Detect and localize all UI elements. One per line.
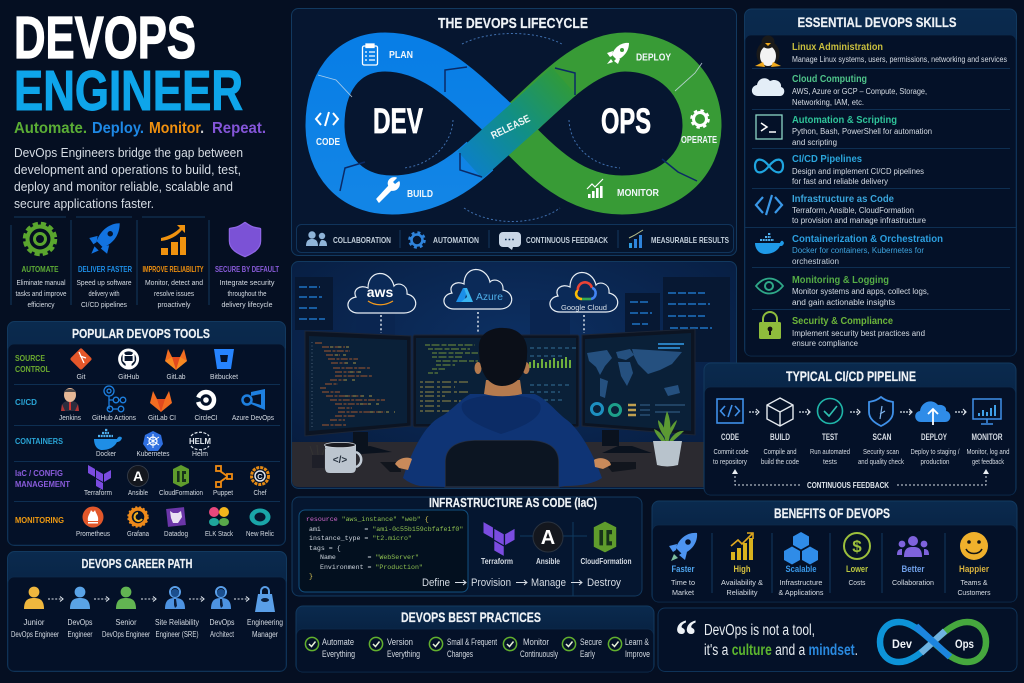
career step labels: DevOps xyxy=(68,618,92,627)
career step labels: Site Reliability xyxy=(155,618,199,627)
card: deliver faster: Speed up software xyxy=(76,278,132,287)
pipeline labels: TEST xyxy=(822,432,838,443)
iac workflow: Provision xyxy=(471,577,511,589)
tool labels: containers: Helm xyxy=(192,449,208,458)
career step labels: Architect xyxy=(210,630,235,639)
practice labels: Version xyxy=(387,637,413,647)
cloud: azure xyxy=(444,269,512,309)
stage: code: CODE xyxy=(316,136,340,148)
row labels: CONTAINERS xyxy=(15,436,63,446)
tool labels: monitoring: New Relic xyxy=(246,529,274,538)
skill: cloud: Networking, IAM, etc. xyxy=(792,98,864,107)
row labels: MANAGEMENT xyxy=(15,479,71,489)
card: secure by default: Integrate security xyxy=(220,278,275,287)
panel: devops lifecycle xyxy=(292,8,736,256)
pipeline descriptions: Run automated xyxy=(810,447,850,456)
skill: security: Security & Compliance xyxy=(792,315,893,327)
row labels: CI/CD xyxy=(15,397,37,407)
label: release: RELEASE xyxy=(489,113,532,142)
career steps icons xyxy=(24,587,275,612)
card: improve reliability: resolve issues xyxy=(154,289,194,298)
tool labels: iac: Puppet xyxy=(213,488,234,497)
benefit descriptions: Time to xyxy=(671,578,695,587)
career step labels: Engineer (SRE) xyxy=(156,630,199,639)
practice labels: Monitor xyxy=(523,637,549,647)
intro paragraph: secure applications faster. xyxy=(14,196,154,211)
skill: iac: Infrastructure as Code xyxy=(792,193,894,205)
title: DevOps: DEVOPS xyxy=(14,5,196,71)
keyboards xyxy=(380,462,636,472)
benefit descriptions: & Applications xyxy=(778,588,824,597)
tool labels: ci/cd: Azure DevOps xyxy=(232,413,274,422)
label: dev: DEV xyxy=(373,102,423,141)
pipeline descriptions: get feedback xyxy=(972,457,1004,466)
skill: security xyxy=(759,312,925,348)
iac workflow: Destroy xyxy=(587,577,621,589)
skill: containers: orchestration xyxy=(792,257,839,266)
skill: linux xyxy=(755,36,1007,67)
heading: career path: DEVOPS CAREER PATH xyxy=(82,556,192,571)
iac workflow xyxy=(422,577,621,589)
stage: deploy xyxy=(607,43,671,64)
benefit titles: Happier xyxy=(959,564,990,574)
skill: automation: Automation & Scripting xyxy=(792,114,897,126)
benefit icons: $ xyxy=(852,537,862,556)
card: improve reliability: proactively xyxy=(158,300,191,309)
pipeline labels: BUILD xyxy=(770,432,790,443)
practice labels: Small & Frequent xyxy=(447,637,497,647)
skill: ci/cd: for fast and reliable delivery xyxy=(792,177,888,186)
card: improve reliability: Monitor, detect and xyxy=(145,278,203,287)
tagline: Repeat. xyxy=(212,120,266,137)
skill: containers: Docker for containers, Kubernetes for xyxy=(792,246,924,255)
icon: rocket xyxy=(89,223,120,254)
benefit titles xyxy=(672,564,990,574)
pipeline labels: CODE xyxy=(721,432,739,443)
intro paragraph: development and operations to build, test, xyxy=(14,162,241,177)
card: deliver faster: DELIVER FASTER xyxy=(78,265,132,274)
tool labels: iac: Terraform xyxy=(84,488,112,497)
quote text: it's a culture and a mindset. xyxy=(704,642,858,659)
pipeline arrows xyxy=(749,409,966,415)
icon: rising chart xyxy=(161,225,186,255)
cloud: aws: aws xyxy=(367,284,393,300)
tagline: Deploy. xyxy=(92,120,144,137)
quote mark: “ xyxy=(675,611,697,660)
skill: automation: Python, Bash, PowerShell for automation xyxy=(792,127,932,136)
row labels: CONTROL xyxy=(15,364,50,374)
bottom strip: practices xyxy=(296,224,734,252)
title: Engineer: ENGINEER xyxy=(14,59,243,123)
skill: monitoring: and gain actionable insights xyxy=(792,298,895,307)
code sample: Name = "WebServer" xyxy=(320,554,419,561)
potted plant xyxy=(653,411,684,466)
stage: plan xyxy=(362,44,413,65)
tool labels: ci/cd: GitLab CI xyxy=(148,413,176,422)
tool labels: ci/cd: Jenkins xyxy=(59,413,81,422)
value cards xyxy=(11,217,279,309)
tool labels: monitoring xyxy=(76,529,274,538)
monitor: code left xyxy=(305,331,411,455)
pipeline descriptions: and quality check xyxy=(858,457,904,466)
tool icons: containers xyxy=(94,430,211,451)
skill: linux: Linux Administration xyxy=(792,41,883,53)
skill: cloud: Cloud Computing xyxy=(792,73,867,85)
icon: cloud xyxy=(752,78,784,96)
benefit descriptions: Collaboration xyxy=(892,578,934,587)
skill: monitoring: Monitor systems and apps, collect logs, xyxy=(792,287,929,296)
benefit descriptions: Market xyxy=(672,588,695,597)
tool labels: monitoring: Grafana xyxy=(127,529,150,538)
practice labels: Improve xyxy=(625,649,650,659)
iac workflow: Define xyxy=(422,577,450,589)
tool labels: monitoring: Prometheus xyxy=(76,529,110,538)
skill: iac xyxy=(756,193,927,225)
code sample: } xyxy=(309,573,313,580)
code sample: ami = "ami-0c55b159cbfafe1f0" xyxy=(309,526,463,533)
code sample xyxy=(299,510,468,592)
skill: automation: and scripting xyxy=(792,138,837,147)
intro paragraph xyxy=(14,145,243,211)
skill: cloud: AWS, Azure or GCP – Compute, Storage, xyxy=(792,87,927,96)
code sample: resource "aws_instance" "web" { xyxy=(306,516,429,523)
card: automate xyxy=(16,224,66,309)
stage: monitor xyxy=(587,179,659,199)
tool labels: iac xyxy=(84,488,267,497)
skill: containers xyxy=(755,233,943,266)
infinity loop xyxy=(318,52,702,195)
benefit titles: Better xyxy=(902,564,925,574)
heading: benefits: BENEFITS OF DEVOPS xyxy=(774,506,890,521)
iac logo labels: Terraform xyxy=(481,556,513,566)
iac logo labels xyxy=(481,556,632,566)
tool labels: source control xyxy=(76,372,239,381)
career step labels: DevOps Engineer xyxy=(102,630,150,639)
pipeline labels: SCAN xyxy=(872,432,892,443)
coffee mug: </> xyxy=(333,455,347,466)
practice labels: Automate xyxy=(322,637,354,647)
pipeline descriptions: build the code xyxy=(761,457,799,466)
person from behind xyxy=(395,328,611,487)
career step labels: Manager xyxy=(252,630,278,639)
cloud: google cloud: Google Cloud xyxy=(561,303,607,312)
tool labels: source control: GitHub xyxy=(118,372,139,381)
icon: feedback bubble xyxy=(499,232,521,250)
iac workflow: Manage xyxy=(531,577,566,589)
row labels: MONITORING xyxy=(15,515,64,525)
tool labels: source control: Bitbucket xyxy=(210,372,239,381)
pipeline descriptions: Deploy to staging / xyxy=(910,447,960,456)
chair xyxy=(445,440,559,487)
panel: essential skills xyxy=(744,9,1016,356)
continuous feedback loop: CONTINUOUS FEEDBACK xyxy=(807,480,890,490)
skill: automation xyxy=(756,114,932,147)
code sample: instance_type = "t2.micro" xyxy=(309,535,412,542)
panel: infrastructure as code xyxy=(292,495,642,596)
skill: iac: to provision and manage infrastructure xyxy=(792,216,927,225)
pipeline icons xyxy=(717,397,1001,426)
icon: infinity xyxy=(755,160,783,172)
card: secure by default: throughout the xyxy=(228,289,266,298)
skill: containers: Containerization & Orchestration xyxy=(792,233,943,245)
row labels: SOURCE xyxy=(15,353,45,363)
iac logos xyxy=(484,522,616,596)
card: secure by default: SECURE BY DEFAULT xyxy=(215,265,279,274)
icon: results chart xyxy=(629,230,643,248)
icon: terminal xyxy=(756,115,782,139)
stage: plan: PLAN xyxy=(389,49,413,61)
monitor: code center xyxy=(413,335,579,427)
benefit descriptions xyxy=(671,578,991,597)
title block xyxy=(14,5,266,211)
coffee mug xyxy=(310,442,361,473)
tool icons: iac: C xyxy=(257,472,263,481)
stage: code xyxy=(316,112,340,148)
practice labels: Changes xyxy=(447,649,473,659)
benefit descriptions: Customers xyxy=(958,588,991,597)
tool icons: iac xyxy=(88,465,268,490)
card: deliver faster: CI/CD pipelines xyxy=(81,300,127,309)
tool labels: ci/cd xyxy=(59,413,274,422)
benefit titles: Faster xyxy=(672,564,695,574)
code sample: tags = { xyxy=(309,545,341,552)
iac logo labels: Ansible xyxy=(536,556,560,566)
benefit titles: High xyxy=(734,564,750,574)
card: improve reliability: IMPROVE RELIABILITY xyxy=(142,265,204,274)
tool labels: monitoring: Datadog xyxy=(164,529,188,538)
tool labels: ci/cd: CircleCI xyxy=(194,413,218,422)
practice labels: Everything xyxy=(322,649,355,659)
heading: skills: ESSENTIAL DEVOPS SKILLS xyxy=(798,14,956,30)
intro paragraph: DevOps Engineers bridge the gap between xyxy=(14,145,243,160)
career arrows xyxy=(48,596,249,602)
card: automate: AUTOMATE xyxy=(22,265,59,274)
career step labels: DevOps Engineer xyxy=(11,630,59,639)
skill: monitoring xyxy=(756,274,929,307)
iac logos: A xyxy=(541,527,555,549)
tool labels: iac: Chef xyxy=(254,488,267,497)
tool labels: ci/cd: GitHub Actions xyxy=(92,413,136,422)
monitor: dashboard right xyxy=(582,329,695,453)
pipeline descriptions: tests xyxy=(823,457,837,466)
dashed flow arrows xyxy=(404,34,620,222)
tool labels: containers: Kubernetes xyxy=(136,449,170,458)
benefit icons xyxy=(669,532,988,564)
skill: ci/cd: Design and implement CI/CD pipelines xyxy=(792,167,924,176)
pipeline descriptions: Security scan xyxy=(863,447,899,456)
practice labels: Learn & xyxy=(625,637,649,647)
card: secure by default: delivery lifecycle xyxy=(222,300,272,309)
icon: shield xyxy=(230,223,260,256)
card: secure by default xyxy=(215,223,279,309)
tool icons: source control xyxy=(70,348,234,370)
practice labels: Everything xyxy=(387,649,420,659)
panel: best practices xyxy=(296,606,654,672)
check icons xyxy=(305,637,622,651)
practice labels xyxy=(322,637,650,659)
label: ops: OPS xyxy=(601,102,651,141)
career step labels: DevOps xyxy=(210,618,234,627)
card: deliver faster xyxy=(76,223,132,309)
row labels xyxy=(15,353,71,525)
bottom strip: practices: MEASURABLE RESULTS xyxy=(651,236,729,245)
pipeline descriptions: Commit code xyxy=(714,447,748,456)
pipeline labels: DEPLOY xyxy=(921,432,947,443)
dev ops logo: Dev xyxy=(892,639,913,651)
pipeline descriptions xyxy=(713,447,1010,466)
skill: security: Implement security best practices and xyxy=(792,329,925,338)
tool labels: source control: Git xyxy=(76,372,86,381)
bottom strip: practices: COLLABORATION xyxy=(333,236,391,245)
stage: deploy: DEPLOY xyxy=(636,52,671,64)
benefit descriptions: Reliability xyxy=(726,588,758,597)
panel: benefits xyxy=(652,501,1017,602)
stage: operate: OPERATE xyxy=(681,135,717,146)
icon: eye xyxy=(756,278,783,294)
skill: security: ensure compliance xyxy=(792,339,859,348)
dev ops logo xyxy=(880,622,986,662)
panel: career path xyxy=(8,552,286,672)
cloud: google cloud xyxy=(550,272,618,312)
panel: quote xyxy=(658,608,1017,672)
tool labels: iac: Ansible xyxy=(128,488,148,497)
pipeline descriptions: Compile and xyxy=(764,447,796,456)
benefit descriptions: Availability & xyxy=(721,578,763,587)
icon: docker whale xyxy=(755,234,784,254)
cloud: azure: Azure xyxy=(476,292,503,303)
benefit titles: Lower xyxy=(846,564,868,574)
career step labels: Engineering xyxy=(247,618,283,627)
tagline: Monitor. xyxy=(149,120,204,137)
heading: iac: INFRASTRUCTURE AS CODE (IaC) xyxy=(429,495,597,510)
quote text xyxy=(704,622,858,659)
card: automate: tasks and improve xyxy=(16,289,66,298)
bottom strip: practices: CONTINUOUS FEEDBACK xyxy=(526,236,608,245)
pipeline descriptions: production xyxy=(920,457,950,466)
stage: operate xyxy=(681,110,717,146)
row labels: IaC / CONFIG xyxy=(15,468,63,478)
career step labels xyxy=(11,618,283,639)
skill: ci/cd xyxy=(755,153,924,186)
tool icons: iac: A xyxy=(133,468,143,484)
pipeline labels xyxy=(721,432,1003,443)
tool labels: iac: CloudFormation xyxy=(159,488,203,497)
skill: cloud xyxy=(752,73,927,107)
career step labels: Engineer xyxy=(68,630,93,639)
tool icons: ci/cd xyxy=(61,386,265,412)
tool icons: monitoring xyxy=(82,506,270,528)
career step labels: Junior xyxy=(24,618,45,627)
tagline: Automate. xyxy=(14,120,87,137)
card: improve reliability xyxy=(142,225,204,309)
skill: ci/cd: CI/CD Pipelines xyxy=(792,153,862,165)
code sample: Environment = "Production" xyxy=(320,564,423,571)
panel: engineer illustration xyxy=(292,262,737,488)
card: automate: Eliminate manual xyxy=(16,278,66,287)
stage: monitor: MONITOR xyxy=(617,187,659,199)
icon: penguin xyxy=(755,36,781,67)
heading: pipeline: TYPICAL CI/CD PIPELINE xyxy=(786,368,916,384)
tagline xyxy=(14,120,266,137)
cloud: aws xyxy=(348,273,416,313)
stage: build xyxy=(377,178,433,202)
benefit descriptions: Costs xyxy=(848,578,866,587)
card: deliver faster: delivery with xyxy=(88,289,120,298)
benefit titles: Scalable xyxy=(786,564,817,574)
intro paragraph: deploy and monitor reliable, scalable and xyxy=(14,179,233,194)
bottom strip: practices: AUTOMATION xyxy=(433,236,479,245)
continuous feedback loop xyxy=(732,469,989,490)
pipeline descriptions: Monitor, log and xyxy=(966,447,1010,456)
panel: ci/cd pipeline xyxy=(704,363,1016,495)
icon: padlock xyxy=(759,312,781,339)
dotted connectors xyxy=(381,312,584,333)
pipeline descriptions: to repository xyxy=(713,457,747,466)
quote text: DevOps is not a tool, xyxy=(704,622,815,639)
icon: collaboration xyxy=(306,231,327,246)
icon: automation gear xyxy=(409,232,425,248)
tool labels: monitoring: ELK Stack xyxy=(205,529,233,538)
panel: popular devops tools xyxy=(8,322,286,546)
heading: best practices: DEVOPS BEST PRACTICES xyxy=(401,609,541,625)
dev ops logo: Ops xyxy=(955,639,974,651)
practice labels: Continuously xyxy=(520,649,558,659)
tool labels: containers xyxy=(96,449,208,458)
desk xyxy=(292,442,737,487)
practice labels: Early xyxy=(580,649,595,659)
career step labels: Senior xyxy=(116,618,137,627)
heading: lifecycle: THE DEVOPS LIFECYCLE xyxy=(438,15,588,32)
iac logo labels: CloudFormation xyxy=(580,556,632,566)
icon: gear xyxy=(24,224,56,254)
pipeline labels: MONITOR xyxy=(972,432,1003,443)
icon: code brackets xyxy=(756,195,782,215)
stage: build: BUILD xyxy=(407,188,433,200)
benefit descriptions: Teams & xyxy=(960,578,988,587)
skill: iac: Terraform, Ansible, CloudFormation xyxy=(792,206,914,215)
city skyline xyxy=(295,277,730,362)
heading: tools: POPULAR DEVOPS TOOLS xyxy=(72,326,210,341)
skill: monitoring: Monitoring & Logging xyxy=(792,274,889,286)
practice labels: Secure xyxy=(580,637,602,647)
tool labels: containers: Docker xyxy=(96,449,116,458)
tool icons: containers: HELM xyxy=(189,436,211,446)
card: automate: efficiency xyxy=(28,300,55,309)
tool labels: source control: GitLab xyxy=(166,372,186,381)
benefit descriptions: Infrastructure xyxy=(780,578,822,587)
